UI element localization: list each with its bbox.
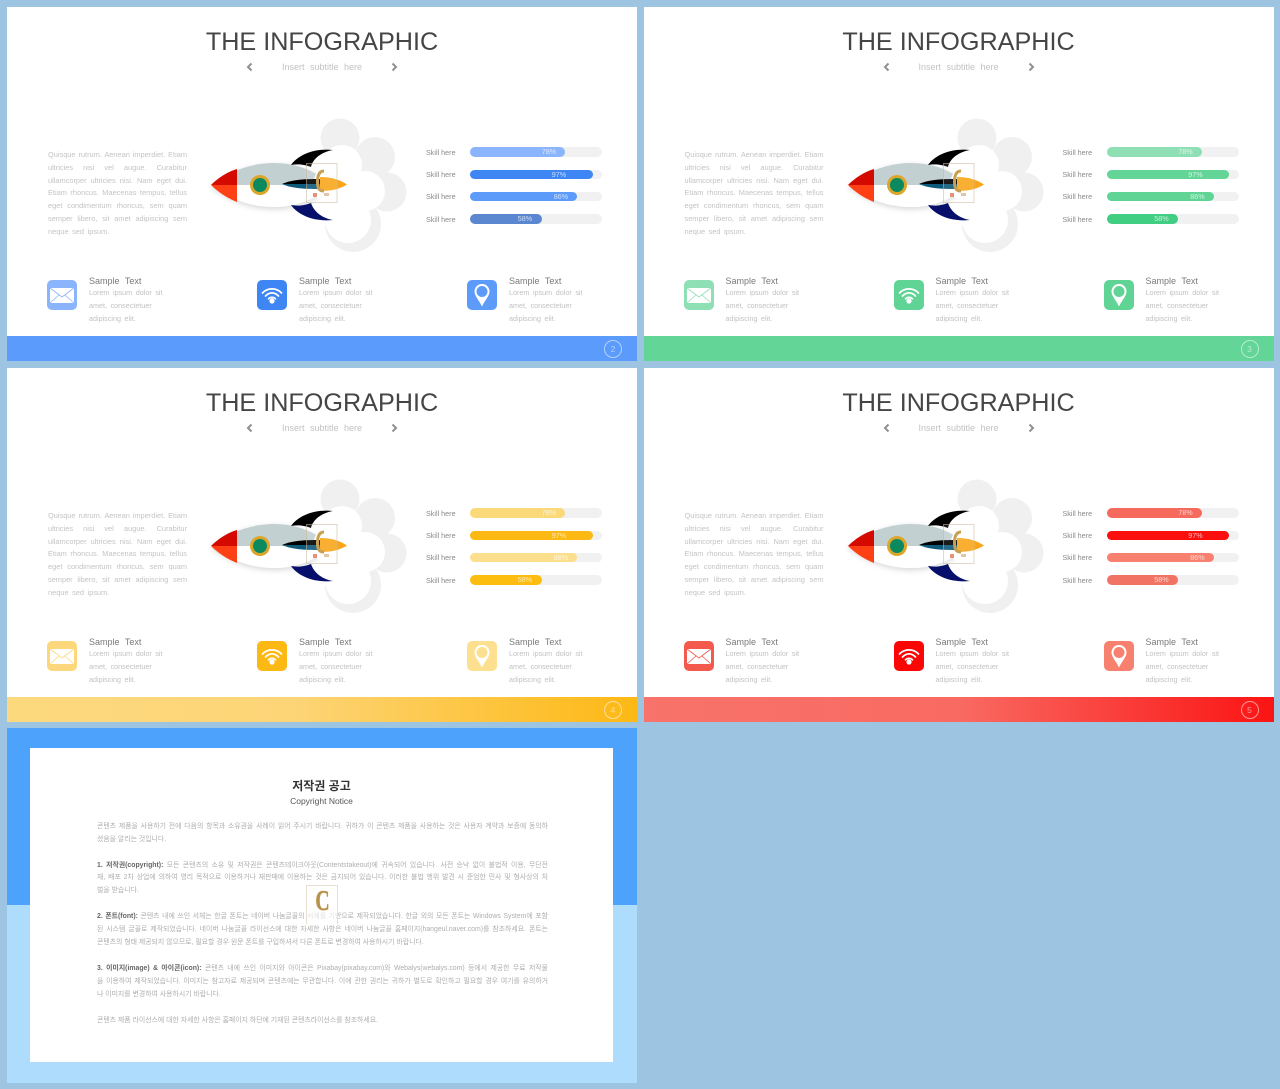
title: THE INFOGRAPHIC <box>842 389 1075 417</box>
text block: notice body: 2. 폰트(font): 콘텐츠 내에 쓰인 서체는 한글 폰트는 네이버 나눔글꼴의 서체를 기반으로 제작되었습니다. 한글 외의 모든 폰트는 Windows System에 포함 <box>97 913 548 920</box>
text block: description: ullamcorper ultricies nisi. Nam eget dui. <box>48 536 187 546</box>
text block: description: eget condimentum rhoncus, sem quam <box>684 562 824 571</box>
feature: mail: Lorem ipsum dolor sit <box>89 649 163 658</box>
feature: wifi: Lorem ipsum dolor sit <box>299 649 373 658</box>
feature: mail: adipiscing elit. <box>89 675 136 684</box>
feature: mail: Sample Text <box>89 637 141 647</box>
skill bar 58%: 58% <box>1154 575 1169 584</box>
footer bar with page number <box>644 697 1274 722</box>
skill bar 97%: Skill here <box>426 531 456 540</box>
text block: description: ultricies nisi vel augue. Curabitur <box>48 524 187 532</box>
footer bar with page number: 5 <box>1247 704 1252 714</box>
skill bar 58% <box>426 575 602 585</box>
bar chart: skills <box>426 508 602 585</box>
feature: location: adipiscing elit. <box>509 314 556 323</box>
icon: right chevron <box>392 424 398 432</box>
skill bar 86%: Skill here <box>1062 553 1092 562</box>
text block: description <box>48 510 187 597</box>
skill bar 78%: 78% <box>1178 508 1193 517</box>
feature: mail: amet, consectetuer <box>726 301 788 310</box>
feature: location: Lorem ipsum dolor sit <box>1146 288 1219 297</box>
slide: red infographic <box>644 368 1274 722</box>
icon: left chevron <box>246 62 252 72</box>
text block: notice body: 콘텐츠 제품을 사용하기 전에 다음의 항목과 소유권을 사례이 읽어 주시기 바랍니다. 귀하가 이 콘텐츠 제품을 사용하는 것은 사용자 계약과 보증에 동의하 <box>97 823 548 830</box>
skill bar 86% <box>426 553 602 562</box>
feature: mail: amet, consectetuer <box>89 301 152 310</box>
feature: wifi: Lorem ipsum dolor sit <box>299 288 373 297</box>
feature: location: amet, consectetuer <box>509 662 572 671</box>
skill bar 86% <box>1062 192 1239 201</box>
skill bar 78%: Skill here <box>426 148 456 156</box>
feature: wifi <box>257 276 373 323</box>
skill bar 78%: Skill here <box>1062 508 1092 518</box>
feature: mail <box>47 637 163 684</box>
text block: description: neque sed ipsum. <box>48 588 109 597</box>
skill bar 78%: 78% <box>542 508 556 517</box>
feature: wifi: Lorem ipsum dolor sit <box>936 288 1009 297</box>
text block: description: neque sed ipsum. <box>684 227 746 236</box>
skill bar 58% <box>1062 214 1239 224</box>
icon: right chevron <box>1028 424 1034 432</box>
footer bar with page number <box>644 336 1274 361</box>
feature: mail: Sample Text <box>726 637 778 647</box>
skill bar 97%: 97% <box>552 170 566 179</box>
footer bar with page number <box>7 336 637 361</box>
feature: wifi: Sample Text <box>299 276 351 286</box>
copyright card <box>30 748 613 1062</box>
feature: wifi: amet, consectetuer <box>299 662 362 671</box>
footer bar with page number <box>7 697 637 722</box>
skill bar 58%: Skill here <box>1062 576 1092 584</box>
skill bar 97% <box>1062 170 1239 179</box>
skill bar 58%: 58% <box>518 214 532 223</box>
skill bar 97% <box>426 531 602 540</box>
text block: description: semper libero, sit amet adipiscing sem <box>684 214 824 223</box>
feature: location: Lorem ipsum dolor sit <box>509 649 583 658</box>
feature: wifi <box>894 636 1064 691</box>
subtitle: Insert subtitle here <box>282 62 362 72</box>
skill bar 97%: Skill here <box>1062 170 1092 179</box>
feature: mail: amet, consectetuer <box>726 662 788 671</box>
heading: 저작권 공고 <box>292 779 351 793</box>
text block: description: Quisque rutrum. Aenean imperdiet. Etiam <box>684 510 824 520</box>
text block: description: Etiam rhoncus. Maecenas tempus, tellus <box>684 549 824 558</box>
text block: description: neque sed ipsum. <box>48 227 109 236</box>
feature: location: Sample Text <box>1146 276 1198 286</box>
feature: location: amet, consectetuer <box>1146 662 1208 671</box>
text block: description: semper libero, sit amet adipiscing sem <box>48 575 187 584</box>
feature: location: Sample Text <box>509 276 561 286</box>
text block: notice body: 나 이미지를 변경하여 사용하시기 바랍니다. <box>97 991 221 998</box>
feature: wifi: Sample Text <box>936 637 988 647</box>
text block: notice body: 콘텐츠 제품 라이선스에 대한 자세한 사항은 홈페이지 하단에 기재된 콘텐츠라이선스를 참조하세요. <box>97 1017 378 1024</box>
icon: rocket with cloud <box>848 480 1044 613</box>
bar chart: skills <box>1062 506 1242 588</box>
text block: notice body: 된 시스템 글꼴로 제작되었습니다. 네이버 나눔글꼴 라이선스에 대한 자세한 사항은 네이버 나눔글꼴 홈페이지(hangeul.naver.com)를 참조하세요. 폰트는 <box>97 926 548 933</box>
footer bar with page number: 3 <box>1247 344 1252 354</box>
watermark: gold letter C: C <box>315 885 329 917</box>
footer bar with page number: 2 <box>611 344 615 354</box>
text block: description: Etiam rhoncus. Maecenas tempus, tellus <box>48 188 187 197</box>
text block: notice body: 콘텐츠의 형태 제공되지 않으므로, 필요할 경우 원문 폰트를 구입하셔서 다른 폰트로 변경하여 사용하시기 바랍니다. <box>97 939 424 946</box>
feature: mail: adipiscing elit. <box>89 314 136 323</box>
watermark: gold letter C <box>306 885 338 924</box>
slide: blue infographic <box>7 7 637 361</box>
skill bar 58% <box>426 214 602 224</box>
feature: wifi: adipiscing elit. <box>299 675 346 684</box>
skill bar 97% <box>1062 531 1238 541</box>
skill bar 86%: 86% <box>1190 553 1205 562</box>
feature: location <box>1104 276 1219 323</box>
skill bar 97%: Skill here <box>426 170 456 179</box>
title: THE INFOGRAPHIC <box>842 28 1075 56</box>
feature: location <box>467 276 583 323</box>
text block: description: ultricies nisi vel augue. Curabitur <box>48 162 187 172</box>
feature: wifi: adipiscing elit. <box>936 675 982 684</box>
text block: description: Etiam rhoncus. Maecenas tempus, tellus <box>48 549 187 558</box>
skill bar 78% <box>1062 508 1238 518</box>
text block: notice body: 3. 이미지(image) & 아이콘(icon): 콘텐츠 내에 쓰인 이미지와 아이콘은 Pixabay(pixabay.com)와 Webalys(webalys.com) 등에서 제공한 무료 저작물 <box>97 965 548 972</box>
text block: description: ullamcorper ultricies nisi. Nam eget dui. <box>684 176 824 184</box>
skill bar 78%: 78% <box>1178 147 1193 156</box>
feature: mail <box>684 636 854 691</box>
subheading: Copyright Notice <box>290 796 353 806</box>
skill bar 58%: 58% <box>1154 214 1169 223</box>
text block: description: eget condimentum rhoncus, sem quam <box>48 201 187 210</box>
text block: notice body: 을 이용하여 제작되었습니다. 이미지는 참고자료 제공되며 콘텐츠에는 무관합니다. 이에 관한 권리는 귀하가 별도로 확인하고 필요할 경우 여기를 유의하거 <box>97 978 548 985</box>
slide: green infographic <box>644 7 1274 361</box>
feature: mail: amet, consectetuer <box>89 662 152 671</box>
icon: right chevron <box>392 62 398 72</box>
text block: notice body: 재, 배포 2차 상업에 의하여 영리 목적으로 이용하거나 재판매에 이용하는 것은 금지되어 있습니다. 이러한 불법 행위 발견 시 준엄한 민사 및 형사상의 처 <box>97 874 548 881</box>
skill bar 58%: Skill here <box>426 576 456 584</box>
feature: location <box>1104 636 1274 691</box>
feature: wifi <box>257 637 373 684</box>
feature: location: amet, consectetuer <box>509 301 572 310</box>
feature: mail: Sample Text <box>89 276 141 286</box>
footer bar with page number: 4 <box>611 704 615 714</box>
feature: location: adipiscing elit. <box>1146 314 1192 323</box>
feature: wifi: amet, consectetuer <box>299 301 362 310</box>
feature: location: amet, consectetuer <box>1146 301 1208 310</box>
icon: left chevron <box>246 424 252 432</box>
feature: mail: adipiscing elit. <box>726 675 772 684</box>
text block: description <box>48 150 187 236</box>
skill bar 86% <box>1062 553 1238 563</box>
skill bar 78%: Skill here <box>426 508 456 518</box>
icon: rocket with cloud <box>211 118 406 252</box>
feature: location: adipiscing elit. <box>1146 675 1192 684</box>
text block: notice body <box>97 821 548 1031</box>
text block: description: Quisque rutrum. Aenean imperdiet. Etiam <box>48 510 187 520</box>
text block: description <box>684 150 824 236</box>
skill bar 58% <box>1062 575 1238 585</box>
skill bar 78% <box>426 508 602 518</box>
skill bar 86%: Skill here <box>426 192 456 201</box>
skill bar 97%: 97% <box>552 531 566 540</box>
skill bar 86%: 86% <box>1190 192 1205 201</box>
panel: copyright notice <box>7 728 637 1083</box>
icon: rocket with cloud <box>211 480 406 613</box>
skill bar 78%: Skill here <box>1062 148 1092 156</box>
feature: wifi: Sample Text <box>299 637 351 647</box>
feature: location: Lorem ipsum dolor sit <box>509 288 583 297</box>
skill bar 86%: 86% <box>554 553 568 562</box>
feature: mail: Lorem ipsum dolor sit <box>726 288 799 297</box>
feature: mail: Lorem ipsum dolor sit <box>726 649 799 658</box>
skill bar 86%: 86% <box>554 192 568 201</box>
skill bar 97% <box>426 170 602 179</box>
skill bar 78% <box>426 147 602 157</box>
feature: mail <box>47 276 163 323</box>
text block: description: Quisque rutrum. Aenean imperdiet. Etiam <box>684 150 824 158</box>
subtitle: Insert subtitle here <box>918 62 999 72</box>
slide: yellow infographic <box>7 368 637 722</box>
text block: description: ultricies nisi vel augue. Curabitur <box>684 162 824 172</box>
skill bar 97%: Skill here <box>1062 531 1092 540</box>
bar chart: skills <box>1062 147 1239 224</box>
text block: description: semper libero, sit amet adipiscing sem <box>684 575 824 584</box>
text block: description: Quisque rutrum. Aenean imperdiet. Etiam <box>48 150 187 158</box>
feature: wifi: adipiscing elit. <box>936 314 982 323</box>
title: THE INFOGRAPHIC <box>206 28 438 56</box>
icon: right chevron <box>1028 62 1034 72</box>
skill bar 58%: Skill here <box>1062 214 1092 224</box>
feature: location: adipiscing elit. <box>509 675 556 684</box>
feature: mail: adipiscing elit. <box>726 314 772 323</box>
text block: notice body: 셨음을 알리는 것입니다. <box>97 836 166 843</box>
icon: rocket with cloud <box>848 118 1044 252</box>
skill bar 97%: 97% <box>1188 531 1203 540</box>
text block: description: neque sed ipsum. <box>684 588 746 597</box>
icon: left chevron <box>884 62 890 72</box>
skill bar 78%: 78% <box>542 147 556 156</box>
bar chart: skills <box>426 147 602 224</box>
feature: wifi: amet, consectetuer <box>936 301 998 310</box>
feature: wifi: Lorem ipsum dolor sit <box>936 649 1009 658</box>
text block: description: ullamcorper ultricies nisi. Nam eget dui. <box>48 176 187 184</box>
feature: mail <box>684 276 799 323</box>
skill bar 97%: 97% <box>1188 170 1203 179</box>
subtitle: Insert subtitle here <box>282 423 362 433</box>
skill bar 86% <box>426 192 602 201</box>
feature: location: Lorem ipsum dolor sit <box>1146 649 1219 658</box>
text block: description: eget condimentum rhoncus, sem quam <box>684 201 824 210</box>
text block: notice body: 1. 저작권(copyright): 모든 콘텐츠의 소유 및 저작권은 콘텐츠테이크아웃(Contentstakeout)에 귀속되어 있습니다. 사전 승낙 없이 불법적 이용, 무단전 <box>97 862 548 869</box>
skill bar 58%: 58% <box>518 575 532 584</box>
skill bar 58%: Skill here <box>426 214 456 224</box>
feature: location: Sample Text <box>1146 637 1198 647</box>
icon: left chevron <box>884 424 890 432</box>
text block: description: Etiam rhoncus. Maecenas tempus, tellus <box>684 188 824 197</box>
feature: wifi <box>894 276 1009 323</box>
subtitle: Insert subtitle here <box>918 423 999 433</box>
feature: location <box>467 637 583 684</box>
text block: description: semper libero, sit amet adipiscing sem <box>48 214 187 223</box>
text block: notice body: 벌을 받습니다. <box>97 887 139 894</box>
title: THE INFOGRAPHIC <box>206 389 438 417</box>
skill bar 86%: Skill here <box>426 553 456 562</box>
feature: wifi: amet, consectetuer <box>936 662 998 671</box>
skill bar 78% <box>1062 147 1239 157</box>
feature: location: Sample Text <box>509 637 561 647</box>
feature: wifi: Sample Text <box>936 276 988 286</box>
feature: mail: Lorem ipsum dolor sit <box>89 288 163 297</box>
text block: description: ullamcorper ultricies nisi. Nam eget dui. <box>684 536 824 546</box>
text block: description <box>684 510 824 597</box>
feature: mail: Sample Text <box>726 276 778 286</box>
skill bar 86%: Skill here <box>1062 192 1092 201</box>
text block: description: ultricies nisi vel augue. Curabitur <box>684 524 824 532</box>
feature: wifi: adipiscing elit. <box>299 314 346 323</box>
text block: description: eget condimentum rhoncus, sem quam <box>48 562 187 571</box>
